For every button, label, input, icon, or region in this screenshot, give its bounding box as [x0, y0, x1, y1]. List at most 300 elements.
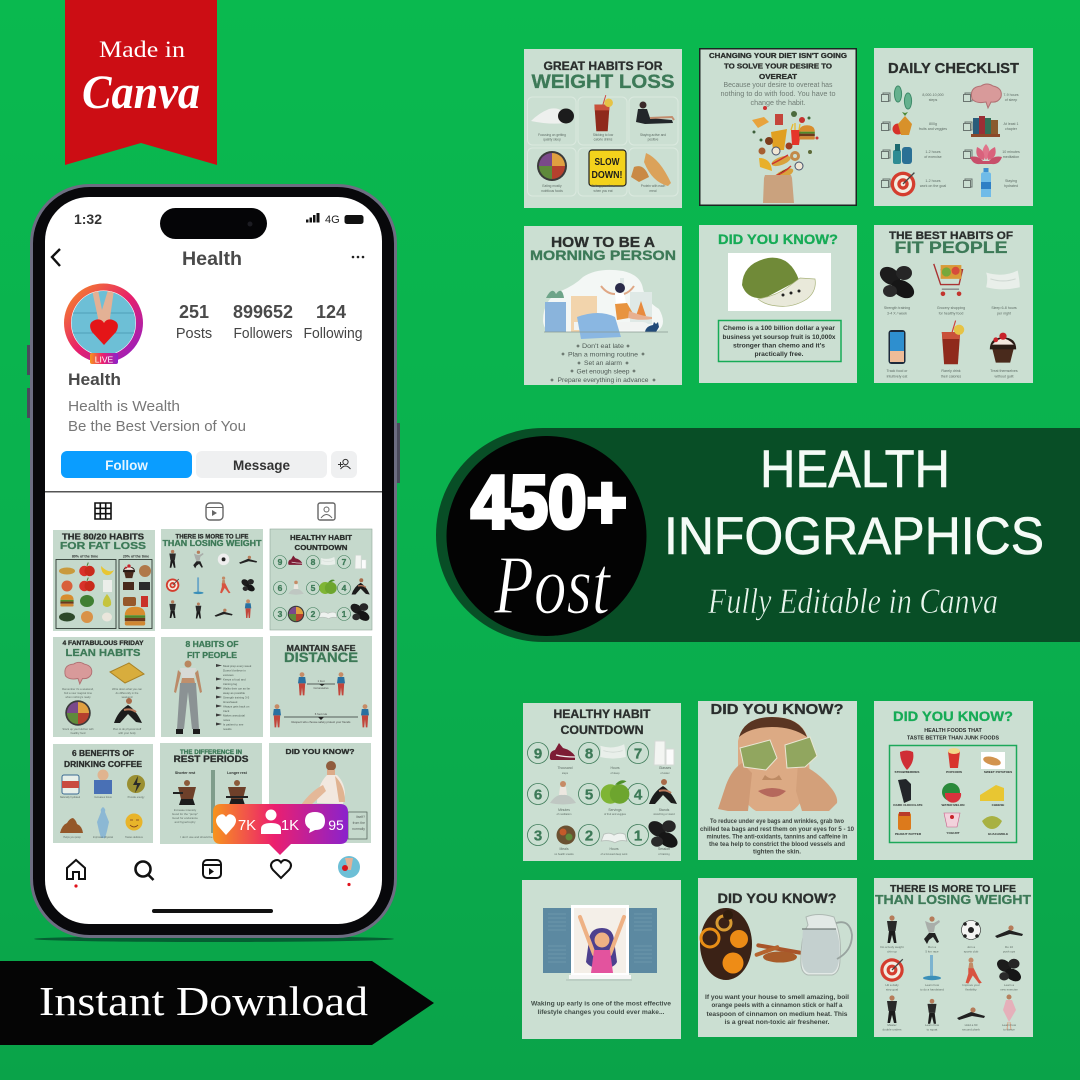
- card: great habits for weight loss: Focusing on getting: [538, 133, 566, 137]
- card: healthy habit countdown: Session: [658, 847, 670, 851]
- card: healthy habit countdown: Servings: [608, 808, 622, 812]
- avatar with live ring: [68, 287, 140, 364]
- card: more to life than losing weight: flexibility: [965, 988, 977, 992]
- card: healthy habit countdown: Meals: [559, 847, 569, 851]
- card: did you know health foods: SWEET POTATOES: [984, 770, 1012, 774]
- card: did you know health foods: CHEESE: [992, 803, 1004, 807]
- card: more to life than losing weight: step goal: [886, 988, 898, 992]
- bio: Health is Wealth: [68, 399, 180, 415]
- mini post: did you know woman: normally: [352, 827, 365, 831]
- water jug: [801, 914, 852, 975]
- mini post: 8 habits of fit people: training log: [223, 682, 238, 686]
- card: healthy habit countdown: Thousand: [557, 766, 573, 770]
- headline: infographics: INFOGRAPHICS: [664, 507, 1044, 566]
- mini post: lean habits: [53, 637, 155, 737]
- card: did you know cinnamon: DID YOU KNOW?: [718, 890, 836, 906]
- card: daily checklist: [874, 48, 1033, 206]
- mini post: 8 habits of fit people: times/week: [223, 700, 238, 704]
- checklist lines: Get enough sleep: [576, 368, 630, 376]
- bottom navigation: [67, 856, 360, 913]
- card: did you know health foods: POPCORN: [946, 770, 963, 774]
- food grid box: [890, 746, 1016, 842]
- card: daily checklist: of sleep: [1005, 98, 1017, 102]
- card: changing your diet: [700, 49, 856, 205]
- card: daily checklist: chapter: [1005, 127, 1018, 131]
- card: healthy habit countdown: Hours: [609, 847, 619, 851]
- card: more to life than losing weight: [874, 878, 1033, 1037]
- card: did you know tea bags: [698, 701, 857, 860]
- card: daily checklist: fruits and veggies: [919, 127, 947, 131]
- icon: followers person: [261, 810, 281, 834]
- card: did you know health foods: DARK CHOCOLATE: [893, 803, 923, 807]
- card: daily checklist: 8,000-10,000: [922, 93, 944, 97]
- card: more to life than losing weight: THERE IS MORE TO LIFE: [890, 883, 1016, 895]
- card: more to life than losing weight: to do a handstand: [920, 988, 944, 992]
- mini post: lean habits: do differently in the: [116, 691, 139, 695]
- mini post: did you know woman: [269, 743, 371, 843]
- mini post: healthy habit countdown: HEALTHY HABIT: [290, 533, 352, 542]
- card: did you know tea bags: DID YOU KNOW?: [710, 701, 844, 718]
- card: more to life than losing weight: Hit a daily: [885, 983, 899, 987]
- mini post: healthy habit countdown: [270, 529, 372, 630]
- card: great habits for weight loss: Sticking to low: [593, 133, 614, 137]
- checklist lines: Set an alarm: [584, 360, 622, 367]
- card: best habits of fit people: Track food or: [886, 369, 908, 373]
- mini post: rest periods: [160, 743, 262, 844]
- mini post: benefits of coffee: Naturally hydrated: [60, 796, 81, 799]
- card: daily checklist: 10 minutes: [1002, 150, 1020, 154]
- card: great habits for weight loss: meal: [650, 189, 657, 193]
- card: healthy habit countdown: of a focused deep work: [601, 852, 628, 856]
- mini post: benefits of coffee: Improves physical: [93, 836, 113, 839]
- icon: books: [971, 116, 1000, 137]
- mini post: maintain safe distance: 6 foot rule: [315, 712, 328, 716]
- mini post: maintain safe distance: 1 foot: [318, 679, 325, 683]
- mini post: lean habits: Stock up your kitchen with: [62, 727, 94, 731]
- profile stats: 124: [316, 302, 346, 322]
- icon: likes heart: [216, 814, 236, 835]
- ribbon text: canva: Canva: [82, 66, 200, 119]
- mini post: 80/20 habits: THE 80/20 HABITS: [62, 532, 144, 542]
- icon: sleep brain: [971, 84, 1001, 108]
- mini post: 8 habits of fit people: [161, 637, 263, 737]
- card: healthy habit countdown: of training: [658, 852, 670, 856]
- card: did you know soursop: DID YOU KNOW?: [718, 231, 838, 247]
- icon: comment bubble: [305, 812, 325, 833]
- card: best habits of fit people: per night: [997, 312, 1011, 316]
- card: healthy habit countdown: of fruit and veggies: [604, 812, 627, 816]
- card: healthy habit countdown: HEALTHY HABIT: [554, 707, 651, 721]
- card: did you know tea bags: chilled tea bags and rest them on your eyes for 5 - 10: [700, 826, 854, 833]
- mini post: healthy habit countdown: 2: [311, 609, 316, 619]
- card: did you know soursop: [699, 225, 857, 383]
- green callout box: stronger than chemo and it's: [733, 342, 825, 350]
- card: daily checklist: Staying: [1005, 179, 1017, 183]
- card: great habits for weight loss: quality sleep: [543, 138, 561, 142]
- mini post: healthy habit countdown: 5: [311, 583, 316, 593]
- mini post: healthy habit countdown: 4: [342, 583, 347, 593]
- card: great habits for weight loss: WEIGHT LOSS: [532, 71, 675, 93]
- mini post: lean habits: weekend: [122, 695, 133, 699]
- bio: Be the Best Version of You: [68, 419, 246, 435]
- card: daily checklist: 1-2 hours: [925, 179, 941, 183]
- card: changing your diet: nothing to do with food. You have to: [720, 91, 836, 98]
- card: more to life than losing weight: Learn how: [1002, 1023, 1017, 1027]
- mini post: maintain safe distance: Coronavirus: [313, 686, 329, 690]
- mini post: 8 habits of fit people: Strength training 3-5: [223, 696, 250, 700]
- mini post: rest periods: Good for the "pump": [172, 812, 198, 816]
- message button: [196, 451, 327, 478]
- icon: nutritious bowl: [537, 151, 567, 181]
- status bar: 4G: [325, 214, 340, 226]
- mini post: lean habits: Remember it's a weekend,: [62, 687, 94, 691]
- card: more to life than losing weight: 5 km race: [925, 950, 939, 954]
- cinnamon sticks: [754, 943, 802, 962]
- mini post: 80/20 habits: FOR FAT LOSS: [60, 541, 146, 552]
- card: great habits for weight loss: Eating mostly: [542, 184, 562, 188]
- mini post: healthy habit countdown: 7: [342, 557, 347, 567]
- card: more to life than losing weight: double unders: [882, 1028, 902, 1032]
- card: more to life than losing weight: Run a: [928, 945, 936, 949]
- mini post: maintain safe distance: DISTANCE: [284, 649, 358, 665]
- card: daily checklist: 7-9 hours: [1003, 93, 1019, 97]
- card: best habits of fit people: Treat themselves: [990, 369, 1018, 373]
- notification bubble: [213, 804, 348, 855]
- card: healthy habit countdown: COUNTDOWN: [560, 723, 643, 737]
- bio: Health: [68, 370, 121, 389]
- mini post: 8 habits of fit people: Always gets back on: [223, 704, 250, 708]
- profile tabs: [95, 503, 335, 520]
- face with tea bags: [718, 717, 837, 811]
- card: more to life than losing weight: Learn how: [925, 983, 940, 987]
- card: best habits of fit people: intuitively eat: [887, 374, 907, 378]
- mini post: rest periods: and hypertrophy: [175, 820, 196, 824]
- profile stats: 899652: [233, 302, 293, 322]
- followers count: 1K: [281, 817, 299, 834]
- card: best habits of fit people: THE BEST HABITS OF: [889, 230, 1013, 242]
- ribbon text: made in: Made in: [99, 37, 186, 62]
- card: more to life than losing weight: Join a: [967, 945, 975, 949]
- card: did you know health foods: PEANUT BUTTER: [895, 832, 922, 836]
- mini post: benefits of coffee: Provide energy: [128, 796, 145, 799]
- card: healthy habit countdown: of water: [660, 771, 670, 775]
- card: more to life than losing weight: to dance: [1003, 1028, 1015, 1032]
- card: did you know tea bags: minutes. The anti-oxidants, tannins and caffeine in: [706, 834, 848, 840]
- phone mockup: [27, 186, 400, 942]
- profile stats: [176, 302, 362, 342]
- card: best habits of fit people: [874, 225, 1033, 383]
- card: healthy habit countdown: Hours: [610, 766, 620, 770]
- mini post: healthy habit countdown: 6: [278, 583, 283, 593]
- icon: slow down sign: [589, 150, 626, 186]
- card: more to life than losing weight: THAN LOSING WEIGHT: [875, 892, 1031, 907]
- card: healthy habit countdown: no health snacks: [554, 852, 574, 856]
- status bar: 1:32: [74, 211, 102, 227]
- card: more to life than losing weight: chin up: [887, 950, 897, 954]
- mini post: rest periods: Good for endurance: [172, 816, 198, 820]
- mini post: lean habits: LEAN HABITS: [66, 647, 140, 659]
- black circle: [446, 436, 646, 636]
- mini post: did you know woman: from the: [353, 821, 365, 825]
- instant download banner: [0, 961, 434, 1045]
- follow button: Follow: [105, 458, 148, 473]
- card: did you know health foods: HEALTH FOODS THAT: [924, 728, 983, 734]
- icon: protein meal: [631, 153, 671, 186]
- card: healthy habit countdown: stretching or stand: [653, 812, 675, 816]
- checklist lines: Don't eat late: [582, 343, 624, 350]
- mini post: 8 habits of fit people: track: [223, 709, 230, 713]
- card: daily checklist: of exercise: [924, 155, 942, 159]
- mini post: healthy habit countdown: 9: [278, 557, 283, 567]
- profile stats: Followers: [234, 326, 292, 342]
- mini post: more to life: THERE IS MORE TO LIFE: [176, 534, 249, 540]
- card: more to life than losing weight: Improve your: [962, 983, 980, 987]
- card: healthy habit countdown: steps: [562, 771, 569, 775]
- icon: water bottle: [981, 168, 991, 197]
- ribbon: made in canva: [65, 0, 217, 165]
- card: more to life than losing weight: sports club: [964, 950, 979, 954]
- mini post: 8 habits of fit people: excuses: [223, 673, 234, 677]
- checklist lines: Prepare everything in advance: [558, 377, 649, 384]
- mini post: healthy habit countdown: 1: [342, 609, 347, 619]
- mini post: 80/20 habits: 20% of the time: [123, 554, 149, 558]
- card: great habits for weight loss: [524, 49, 682, 208]
- card: great habits for weight loss: nutritious foods: [541, 189, 563, 193]
- icon: slow down sign: SLOW: [594, 157, 620, 168]
- mini post: 8 habits of fit people: Is patient to see: [223, 722, 244, 726]
- mini post: lean habits: Plan to do physical stuff: [113, 727, 141, 731]
- card: healthy habit countdown: 4: [634, 786, 643, 804]
- card: healthy habit countdown: 3: [534, 828, 542, 844]
- mini post: healthy habit countdown: 3: [278, 609, 283, 619]
- icon: sleeping person: [531, 108, 574, 124]
- card: did you know tea bags: To reduce under eye bags and wrinkles, grab two: [710, 818, 844, 825]
- card: best habits of fit people: FIT PEOPLE: [894, 238, 1008, 257]
- icon: lotus: [970, 144, 1002, 164]
- card: more to life than losing weight: Do a body weight: [880, 945, 904, 949]
- mini post: 8 habits of fit people: 8 HABITS OF: [186, 639, 238, 649]
- card: daily checklist: steps: [929, 98, 937, 102]
- card: daily checklist: 800g: [929, 122, 937, 126]
- mini post: healthy habit countdown: 8: [311, 557, 316, 567]
- card: how to be a morning person: HOW TO BE A: [551, 235, 656, 251]
- icon: low calorie drink: [594, 95, 613, 131]
- card: more to life than losing weight: new exercise: [1000, 988, 1018, 992]
- card: healthy habit countdown: of sleep: [610, 771, 620, 775]
- card: daily checklist: At least 1: [1004, 122, 1018, 126]
- follow button: [61, 451, 192, 478]
- card: did you know health foods: WATER MELON: [942, 803, 965, 807]
- bio: [68, 370, 246, 435]
- mini post: benefits of coffee: 6 BENEFITS OF: [72, 749, 134, 758]
- status bar: [74, 208, 364, 239]
- icon: paper bag: [763, 175, 794, 203]
- mini post: maintain safe distance: [270, 636, 372, 737]
- card: daily checklist: work on the goal: [920, 184, 946, 188]
- headline: health: HEALTH: [760, 440, 950, 499]
- card: best habits of fit people: their calories: [941, 374, 961, 378]
- card: changing your diet: TO SOLVE YOUR DESIRE TO: [724, 62, 832, 70]
- oranges on board: [700, 908, 752, 980]
- card: did you know health foods: YOGURT: [946, 831, 960, 835]
- card: more to life than losing weight: Do 10: [1005, 945, 1013, 949]
- checklist lines: [550, 343, 656, 384]
- card: great habits for weight loss: positive: [648, 138, 659, 142]
- icon: active woman: [636, 102, 674, 124]
- profile stats: Following: [304, 326, 362, 342]
- card: did you know cinnamon: If you want your house to smell amazing, boil: [705, 994, 849, 1001]
- mini post: more to life: THAN LOSING WEIGHT: [162, 539, 262, 548]
- mini post: maintain safe distance: MAINTAIN SAFE: [286, 643, 356, 653]
- card: healthy habit countdown: 2: [585, 828, 593, 844]
- card: waking up early window: [522, 880, 681, 1039]
- card: healthy habit countdown: 1: [634, 828, 642, 844]
- comments count: 95: [328, 817, 344, 833]
- icon: backpack: [893, 144, 912, 164]
- card: healthy habit countdown: [523, 703, 681, 861]
- mini post: lean habits: 4 FANTABULOUS FRIDAY: [62, 640, 144, 647]
- mini post: 8 habits of fit people: away as possible: [223, 691, 245, 695]
- card: great habits for weight loss: Taking your time: [591, 184, 615, 188]
- card: best habits of fit people: without guilt: [995, 374, 1013, 378]
- subtitle: fully editable in canva: Fully Editable in Canva: [707, 581, 998, 621]
- mini post: lean habits: Write down what you can: [112, 687, 142, 691]
- card: daily checklist: DAILY CHECKLIST: [888, 60, 1019, 77]
- soursop photo: [728, 253, 831, 311]
- card: healthy habit countdown: of meditation: [557, 812, 572, 816]
- mini post: maintain safe distance: Respect who choose safety protect your friends: [292, 720, 351, 724]
- card: did you know health foods: STRAWBERRIES: [895, 770, 919, 774]
- icon: fruit: [892, 112, 912, 135]
- card: waking up early window: lifestyle changes you could ever make...: [538, 1009, 665, 1016]
- mini post: more to life: [161, 529, 263, 629]
- card: changing your diet: Because your desire to overeat has: [724, 82, 833, 89]
- mini post: 8 habits of fit people: Doesn't believe in: [223, 668, 246, 672]
- likes count: 7K: [238, 817, 256, 834]
- bedroom illustration: [543, 270, 668, 339]
- card: more to life than losing weight: Master: [887, 1023, 897, 1027]
- card: changing your diet: change the habit.: [750, 100, 806, 107]
- card: how to be a morning person: MORNING PERSON: [530, 247, 676, 263]
- mini post: rest periods: Longer rest: [227, 771, 248, 775]
- icon: reels: [203, 860, 221, 878]
- green callout box: practically free.: [754, 351, 804, 358]
- icon: heart: [271, 860, 291, 878]
- checklist lines: Plan a morning routine: [568, 352, 638, 358]
- card: did you know tea bags: tighten the skin.: [753, 848, 801, 856]
- card: great habits for weight loss: calorie drinks: [594, 138, 613, 142]
- card: did you know tea bags: the tea help to constrict the blood vessels and: [709, 841, 845, 848]
- mini post: 8 habits of fit people: results: [223, 727, 232, 731]
- card: best habits of fit people: for healthy food: [939, 312, 963, 316]
- card: great habits for weight loss: Staying active and: [640, 133, 666, 137]
- card: best habits of fit people: 3-4 X / week: [887, 312, 907, 316]
- green callout box: [718, 320, 841, 362]
- card: did you know cinnamon: [698, 878, 857, 1037]
- card: daily checklist: hydrated: [1004, 184, 1018, 188]
- mini post: 80/20 habits: 80% of the time: [72, 554, 98, 558]
- central title banner: [436, 428, 1080, 642]
- card: did you know cinnamon: is a great non-toxic air freshener.: [724, 1019, 830, 1026]
- mini post: lean habits: find a new magical time: [64, 691, 93, 695]
- mini post: benefits of coffee: [53, 744, 153, 843]
- card: more to life than losing weight: Learn a: [1004, 983, 1014, 987]
- card: healthy habit countdown: Glasses: [659, 766, 671, 770]
- card: more to life than losing weight: push ups: [1003, 950, 1016, 954]
- 450+ count: 450+: [471, 460, 627, 544]
- card: how to be a morning person: [524, 226, 682, 385]
- mini post: lean habits: when nothing's ready: [65, 695, 91, 699]
- card: best habits of fit people: Rarely drink: [941, 369, 961, 373]
- card: healthy habit countdown: Minutes: [558, 808, 570, 812]
- add friend button: [331, 451, 357, 478]
- mini post: 8 habits of fit people: FIT PEOPLE: [187, 650, 237, 660]
- card: best habits of fit people: Strength training: [884, 306, 910, 310]
- mini post: 8 habits of fit people: Meal prep every week: [223, 664, 252, 668]
- mini post: benefits of coffee: Increases focus: [94, 796, 113, 799]
- card: more to life than losing weight: Learn how: [925, 1023, 940, 1027]
- instant download banner: Instant Download: [39, 978, 368, 1024]
- card: did you know health foods: TASTE BETTER THAN JUNK FOODS: [907, 736, 999, 742]
- card: best habits of fit people: Sleep 6-8 hours: [991, 306, 1017, 310]
- green callout box: Chemo is a 100 billion dollar a year: [723, 325, 835, 332]
- post script word: Post: [493, 539, 612, 632]
- mini post: rest periods: I don't use and should be used: [180, 835, 220, 839]
- card: best habits of fit people: Grocery shopping: [937, 306, 965, 310]
- card: healthy habit countdown: 5: [585, 786, 593, 804]
- card: did you know health foods: [874, 701, 1033, 860]
- card: healthy habit countdown: 9: [534, 746, 542, 762]
- mini post: did you know woman: itself?: [356, 815, 365, 819]
- card: did you know health foods: GUACAMOLE: [988, 832, 1008, 836]
- mini post: 8 habits of fit people: notes: [223, 718, 231, 722]
- profile stats: 251: [179, 302, 209, 322]
- mini post: benefits of coffee: DRINKING COFFEE: [64, 760, 142, 769]
- card: waking up early window: Waking up early is one of the most effective: [531, 1000, 671, 1008]
- mini post: rest periods: Increase intensity: [174, 808, 197, 812]
- card: changing your diet: OVEREAT: [759, 72, 798, 81]
- card: changing your diet: CHANGING YOUR DIET ISN'T GOING: [709, 51, 847, 60]
- green callout box: business yet soursop fruit is 10,000x: [722, 334, 836, 341]
- window illustration: [543, 905, 657, 981]
- mini post: 8 habits of fit people: Walks their car as far: [223, 686, 250, 690]
- card: great habits for weight loss: when you eat: [594, 189, 613, 193]
- icon: soccer ball: [962, 920, 980, 940]
- avatar with live ring: LIVE: [95, 354, 114, 364]
- icon: footsteps: [894, 86, 912, 109]
- mini post: benefits of coffee: Tastes delicious: [125, 836, 144, 839]
- card: healthy habit countdown: 8: [585, 746, 593, 762]
- card: did you know cinnamon: teaspoon of cinnamon on medium heat. This: [706, 1011, 848, 1018]
- mini post: rest periods: THE DIFFERENCE IN: [180, 750, 242, 756]
- mini post: 80/20 habits: [53, 530, 155, 631]
- card: more to life than losing weight: second plank: [962, 1028, 980, 1032]
- icon: search: [136, 862, 154, 880]
- card: daily checklist: 1-2 hours: [925, 150, 941, 154]
- card: great habits for weight loss: Protein with each: [641, 184, 665, 188]
- mini post: 8 habits of fit people: Makes anecdotal: [223, 714, 245, 718]
- mini post: benefits of coffee: Helps you poop: [63, 836, 81, 839]
- mini post: healthy habit countdown: COUNTDOWN: [294, 543, 348, 552]
- mini post: 8 habits of fit people: Keeps a food and: [223, 678, 246, 682]
- card: more to life than losing weight: to squat: [927, 1028, 937, 1032]
- mini post: rest periods: REST PERIODS: [174, 754, 248, 765]
- card: daily checklist: meditation: [1003, 155, 1019, 159]
- card: more to life than losing weight: Hold a 60: [965, 1023, 978, 1027]
- mini post: lean habits: with your body: [118, 731, 136, 735]
- profile header: Health: [182, 249, 242, 270]
- mini post: lean habits: healthy food: [71, 731, 86, 735]
